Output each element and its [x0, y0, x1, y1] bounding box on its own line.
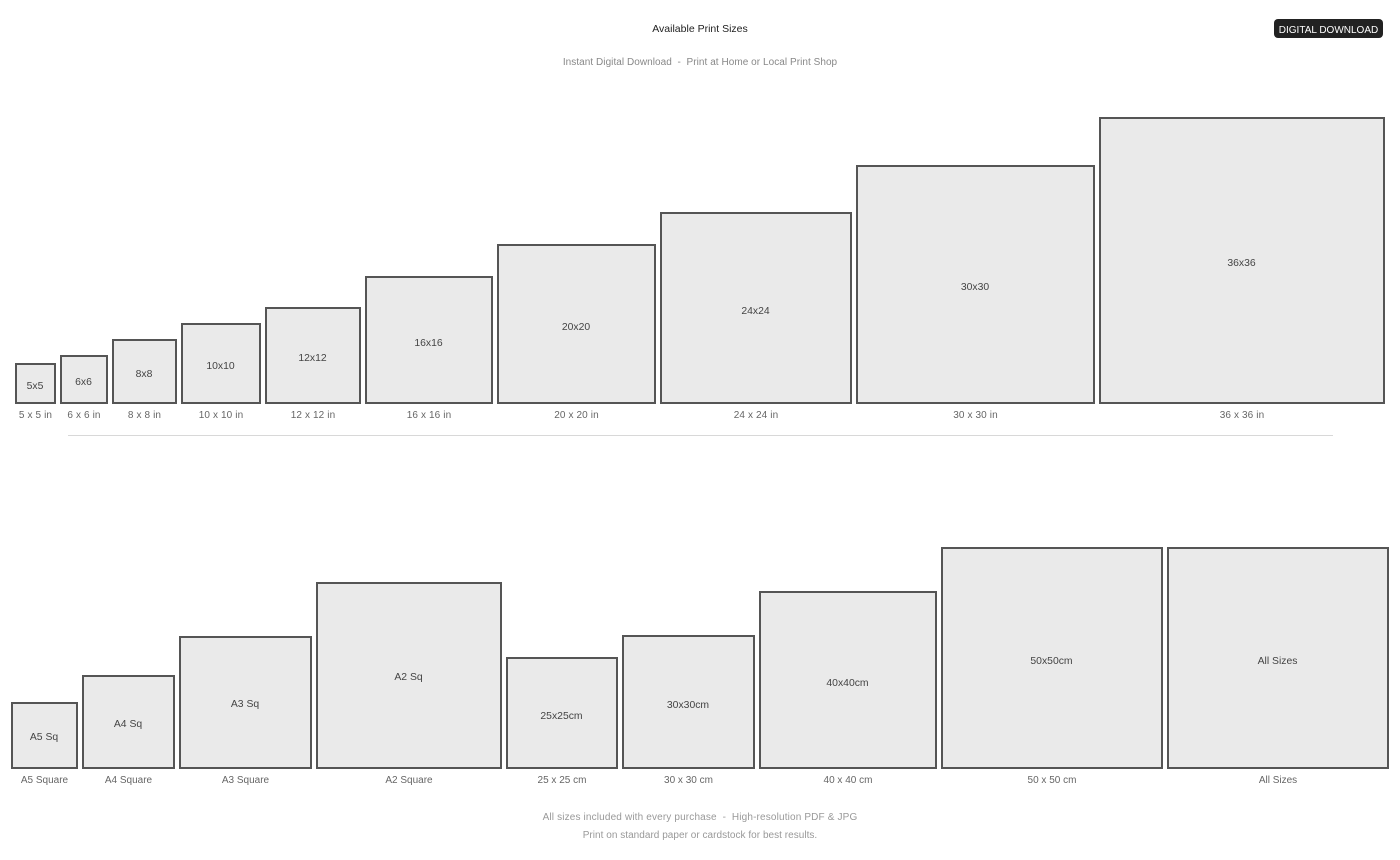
- size: A5 square: [11, 702, 78, 786]
- size: 12x12 in: [265, 307, 361, 421]
- size: 10x10 in: 10x10: [206, 361, 235, 372]
- panel: A-series and metric sizes: All Sizes: [1259, 775, 1297, 786]
- panel: inch sizes: 36 x 36 in: [1220, 410, 1264, 421]
- panel: inch sizes: 12 x 12 in: [291, 410, 335, 421]
- size: 25x25 cm: 25x25cm: [540, 711, 583, 722]
- panel: A-series and metric sizes: 40 x 40 cm: [824, 775, 872, 786]
- size: 40x40 cm: 40x40cm: [826, 678, 869, 689]
- panel: inch sizes: 24 x 24 in: [734, 410, 778, 421]
- size: 5x5 in: 5x5: [27, 381, 43, 392]
- size: 8x8 in: [112, 339, 177, 421]
- size: 30x30 cm: 30x30cm: [667, 700, 709, 711]
- panel: A-series and metric sizes: 25 x 25 cm: [538, 775, 586, 786]
- size: 50x50 cm: 50x50cm: [1030, 656, 1073, 667]
- panel: A-series and metric sizes: A4 Square: [105, 775, 152, 786]
- size: all sizes: All Sizes: [1258, 656, 1297, 667]
- size: 24x24 in: 24x24: [741, 306, 770, 317]
- size: 10x10 in: [181, 323, 261, 421]
- size: 16x16 in: [365, 276, 493, 421]
- size: 6x6 in: 6x6: [75, 377, 92, 388]
- size: 24x24 in: [660, 212, 852, 421]
- panel: inch sizes: 10 x 10 in: [199, 410, 243, 421]
- size: 50x50 cm: [941, 547, 1163, 786]
- size: 30x30 cm: [622, 635, 755, 786]
- panel: inch sizes: 5 x 5 in: [19, 410, 52, 421]
- panel: inch sizes: 8 x 8 in: [128, 410, 161, 421]
- size: 40x40 cm: [759, 591, 937, 786]
- panel: inch sizes: [15, 117, 1385, 421]
- size: A3 square: A3 Sq: [231, 699, 259, 710]
- panel: A-series and metric sizes: [11, 547, 1389, 786]
- size: 30x30 in: 30x30: [961, 282, 989, 293]
- size: A4 square: A4 Sq: [114, 719, 142, 730]
- panel: A-series and metric sizes: A5 Square: [21, 775, 68, 786]
- size: 12x12 in: 12x12: [298, 353, 327, 364]
- size: 8x8 in: 8x8: [136, 369, 152, 380]
- panel: A-series and metric sizes: 50 x 50 cm: [1028, 775, 1076, 786]
- panel: inch sizes: 16 x 16 in: [407, 410, 451, 421]
- size: 30x30 in: [856, 165, 1095, 421]
- size: A3 square: [179, 636, 312, 786]
- size: all sizes: [1167, 547, 1389, 786]
- panel: A-series and metric sizes: A2 Square: [385, 775, 433, 786]
- size: 25x25 cm: [506, 657, 618, 786]
- size: A4 square: [82, 675, 175, 786]
- footer note: All sizes included with every purchase - High-resolution PDF & JPG: [543, 812, 857, 823]
- size: A2 square: [316, 582, 502, 786]
- footer note: [542, 812, 857, 841]
- subtitle: Instant Digital Download - Print at Home or Local Print Shop: [563, 57, 837, 68]
- panel: inch sizes: 6 x 6 in: [67, 410, 101, 421]
- badge: digital download: [1274, 19, 1383, 38]
- size: A5 square: A5 Sq: [30, 732, 58, 743]
- panel: inch sizes: 30 x 30 in: [953, 410, 998, 421]
- panel: A-series and metric sizes: 30 x 30 cm: [664, 775, 713, 786]
- size: 6x6 in: [60, 355, 108, 421]
- size: 36x36 in: [1099, 117, 1385, 421]
- size: 20x20 in: [497, 244, 656, 421]
- size: 36x36 in: 36x36: [1227, 258, 1256, 269]
- size: 5x5 in: [15, 363, 56, 421]
- size: A2 square: A2 Sq: [394, 672, 423, 683]
- panel: A-series and metric sizes: A3 Square: [222, 775, 269, 786]
- size: 20x20 in: 20x20: [562, 322, 590, 333]
- title: Available Print Sizes: [652, 23, 748, 35]
- footer note: Print on standard paper or cardstock for best results.: [583, 830, 817, 841]
- panel: inch sizes: 20 x 20 in: [554, 410, 599, 421]
- badge: digital download: DIGITAL DOWNLOAD: [1279, 25, 1378, 36]
- size: 16x16 in: 16x16: [414, 338, 443, 349]
